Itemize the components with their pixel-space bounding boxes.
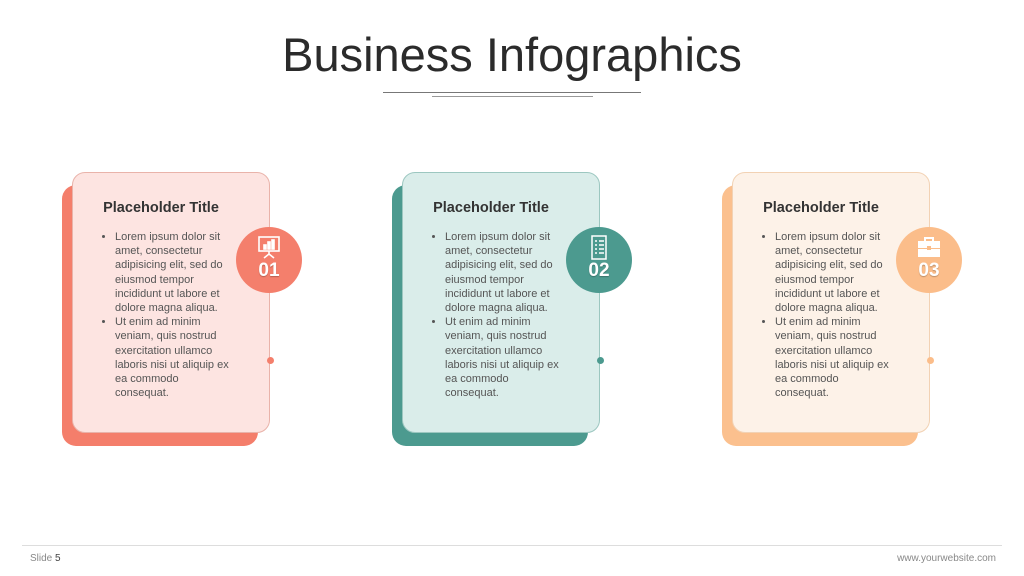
text block 01: Lorem ipsum dolor sit amet, consectetur adipisicing elit, sed do eiusmod tempor incididunt ut labore et dolore magna aliqua. <box>115 231 223 314</box>
text block 01 <box>102 231 229 399</box>
heading 01: Placeholder Title <box>103 200 219 216</box>
title underline <box>383 92 641 93</box>
icon: presentation 01 <box>236 227 302 293</box>
icon: briefcase 03: 03 <box>918 260 940 281</box>
panel: card 02 <box>392 172 632 446</box>
text block 03 <box>762 231 889 399</box>
text block 02: Ut enim ad minim veniam, quis nostrud exercitation ullamco laboris nisi ut aliquip ex ea commodo consequat. <box>445 316 559 399</box>
panel: card 01 <box>62 172 302 446</box>
footer: website: www.yourwebsite.com <box>897 553 996 564</box>
footer: slide number: Slide 5 <box>30 553 61 564</box>
title: Business Infographics <box>282 28 742 81</box>
heading 03: Placeholder Title <box>763 200 879 216</box>
footer line <box>22 545 1002 546</box>
text block 02: Lorem ipsum dolor sit amet, consectetur adipisicing elit, sed do eiusmod tempor incididunt ut labore et dolore magna aliqua. <box>445 231 553 314</box>
text block 01: Ut enim ad minim veniam, quis nostrud exercitation ullamco laboris nisi ut aliquip ex ea commodo consequat. <box>115 316 229 399</box>
text block 03: Lorem ipsum dolor sit amet, consectetur adipisicing elit, sed do eiusmod tempor incididunt ut labore et dolore magna aliqua. <box>775 231 883 314</box>
icon: presentation 01: 01 <box>258 260 280 281</box>
heading 02: Placeholder Title <box>433 200 549 216</box>
icon: checklist 02: 02 <box>588 260 610 281</box>
icon: checklist 02 <box>566 227 632 293</box>
panel: card 03 <box>722 172 962 446</box>
icon: briefcase 03 <box>896 227 962 293</box>
text block 02 <box>432 231 559 399</box>
text block 03: Ut enim ad minim veniam, quis nostrud exercitation ullamco laboris nisi ut aliquip ex ea commodo consequat. <box>775 316 889 399</box>
